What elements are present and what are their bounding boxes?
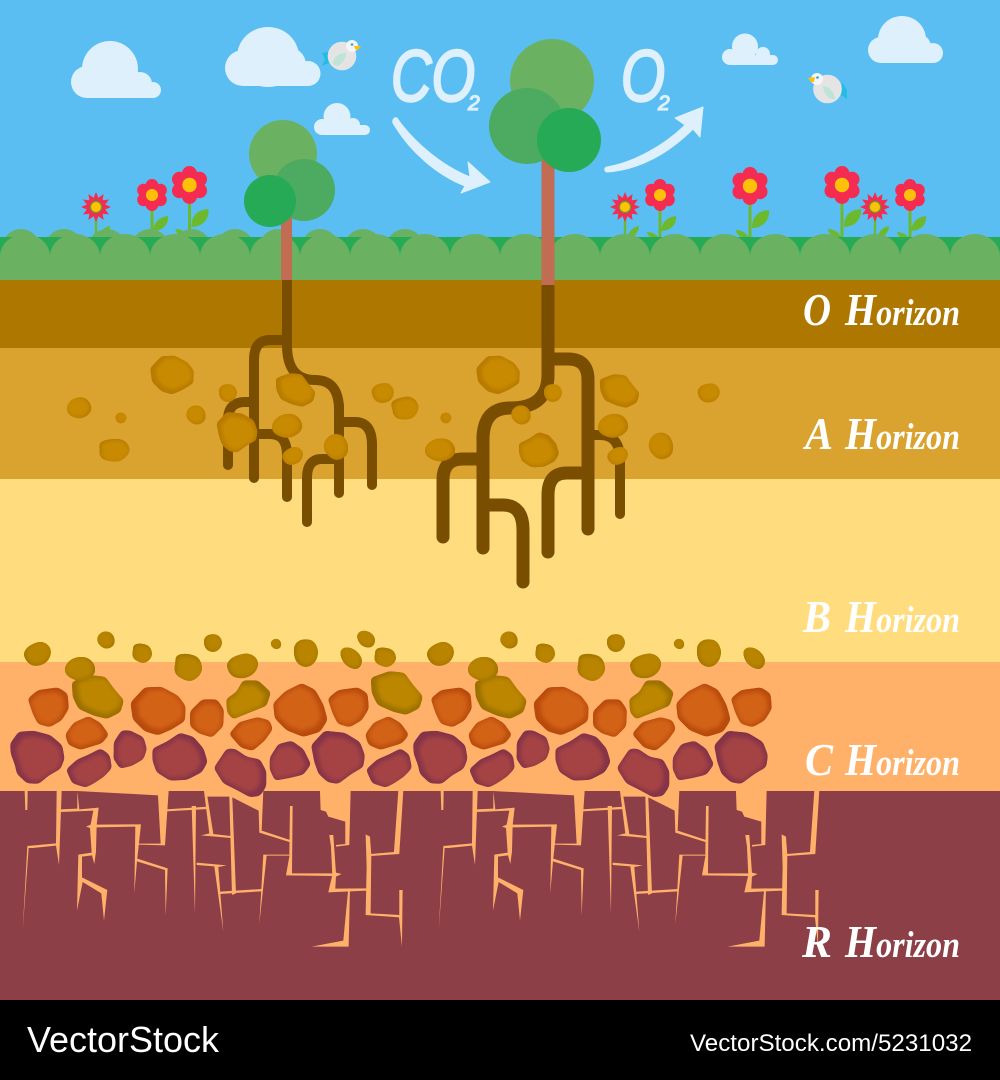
sky background xyxy=(0,0,1000,280)
label: O Horizon xyxy=(803,284,960,335)
O2 label: O xyxy=(621,37,665,117)
soil layer: R horizon xyxy=(0,791,1000,1000)
label: C Horizon: C xyxy=(805,734,834,785)
roots xyxy=(228,280,372,522)
footer brand: VectorStock xyxy=(27,1019,220,1060)
label: B Horizon xyxy=(802,591,960,642)
flower xyxy=(610,192,640,241)
cloud 4 xyxy=(722,34,778,65)
arrow: CO2 into tree xyxy=(393,118,490,193)
large tree xyxy=(443,39,620,582)
flower xyxy=(645,179,676,240)
O2 label: 2 xyxy=(657,92,670,115)
label: R Horizon xyxy=(801,916,960,967)
trunk xyxy=(281,195,292,280)
cracked bedrock xyxy=(23,791,819,947)
crown xyxy=(489,39,601,172)
soil layer: O horizon xyxy=(0,280,1000,348)
soil layer: A horizon xyxy=(0,348,1000,479)
label: B Horizon: B xyxy=(802,591,831,642)
grass hedge xyxy=(0,229,1000,280)
bird right xyxy=(808,73,847,103)
flower xyxy=(824,166,861,243)
label: O Horizon: O xyxy=(803,284,831,335)
roots xyxy=(443,285,620,582)
flower xyxy=(137,179,168,240)
cloud 5 xyxy=(868,16,943,63)
label: O Horizon: Horizon xyxy=(844,284,960,335)
footer bar xyxy=(0,1000,1000,1080)
label: C Horizon: Horizon xyxy=(844,734,960,785)
label: A Horizon xyxy=(802,408,960,459)
flowers xyxy=(81,166,926,244)
label: A Horizon: Horizon xyxy=(844,408,960,459)
clouds xyxy=(71,16,943,135)
rocks: large olive xyxy=(72,671,674,719)
flower xyxy=(895,179,926,240)
flower xyxy=(172,166,209,243)
label: R Horizon: Horizon xyxy=(844,916,960,967)
bird left xyxy=(322,40,361,70)
label: C Horizon xyxy=(805,734,960,785)
flower xyxy=(81,192,111,241)
label: A Horizon: A xyxy=(802,408,833,459)
rocks in A horizon xyxy=(64,357,721,468)
rocks: small olive xyxy=(21,627,769,683)
CO2 label: CO xyxy=(391,37,475,117)
footer url: VectorStock.com/5231032 xyxy=(690,1030,972,1057)
label: B Horizon: Horizon xyxy=(844,591,960,642)
CO2 label: 2 xyxy=(467,92,480,115)
soil layer: C horizon xyxy=(0,662,1000,791)
flower xyxy=(732,167,769,244)
rocks: maroon row xyxy=(10,731,768,797)
cloud 2 xyxy=(225,27,320,87)
flower xyxy=(860,192,890,241)
arrow: O2 out of tree xyxy=(605,107,703,172)
label: R Horizon: R xyxy=(801,916,832,967)
trunk xyxy=(542,150,554,285)
crown xyxy=(244,120,335,227)
soil layer: B horizon xyxy=(0,479,1000,662)
cloud 1 xyxy=(71,41,161,98)
rocks: orange row xyxy=(28,683,772,751)
small tree xyxy=(228,120,372,522)
cloud 3 xyxy=(314,103,370,135)
